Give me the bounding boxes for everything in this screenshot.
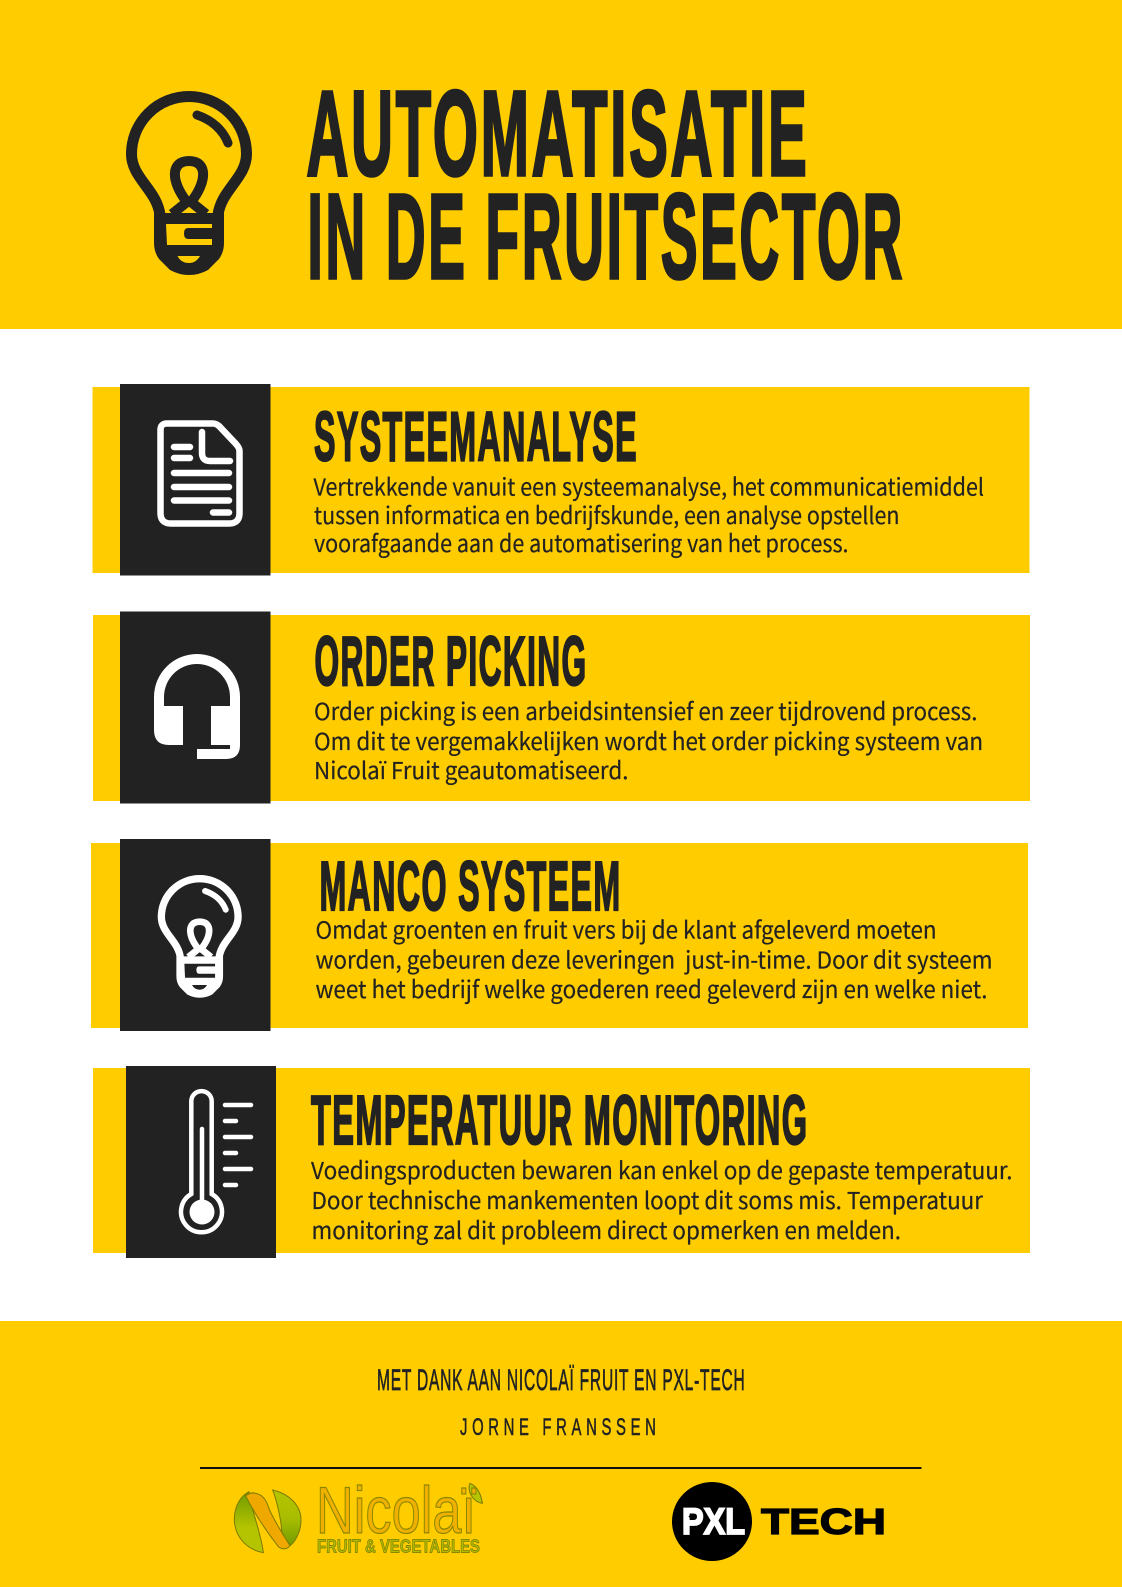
text block [316, 912, 992, 1005]
panel: order picking [93, 612, 1030, 804]
panel: systeemanalyse [92, 384, 1030, 576]
text block: Omdat groenten en fruit vers bij de klant afgeleverd moeten [316, 912, 936, 946]
logo: nicolai: Nicolaï [316, 1473, 477, 1547]
icon: light bulb [161, 879, 238, 998]
credits line: MET DANK AAN NICOLAÏ FRUIT EN PXL-TECH [377, 1364, 746, 1397]
text block: Door technische mankementen loopt dit soms mis. Temperatuur [312, 1182, 984, 1216]
author name: JORNE FRANSSEN [460, 1415, 665, 1441]
panel: temperatuur monitoring [93, 1066, 1030, 1258]
text block: worden, gebeuren deze leveringen just-in-time. Door dit systeem [316, 942, 992, 976]
icon: header light bulb [132, 96, 246, 275]
text block: voorafgaande aan de automatisering van het process. [314, 525, 848, 559]
text block [311, 1152, 1012, 1246]
text block: Order picking is een arbeidsintensief en zeer tijdrovend process. [314, 693, 978, 727]
icon: thermometer [181, 1091, 251, 1232]
title [306, 65, 905, 304]
icon: document [160, 424, 240, 524]
text block: weet het bedrijf welke goederen reed geleverd zijn en welke niet. [316, 971, 988, 1005]
text block: Vertrekkende vanuit een systeemanalyse, het communicatiemiddel [314, 468, 984, 502]
panel: manco systeem [91, 839, 1028, 1031]
text block: Nicolaï Fruit geautomatiseerd. [314, 752, 628, 786]
text block [314, 693, 983, 786]
footer band [0, 1321, 1122, 1587]
text block: Voedingsproducten bewaren kan enkel op de gepaste temperatuur. [311, 1152, 1012, 1186]
panel: order picking: ORDER PICKING [314, 622, 588, 700]
header band [0, 0, 1122, 329]
text block [314, 468, 984, 559]
text block: Om dit te vergemakkelijken wordt het order picking systeem van [314, 723, 983, 757]
logo: nicolai [234, 1473, 482, 1557]
logo: pxl tech: PXL [682, 1501, 745, 1542]
icon: headset [154, 654, 240, 759]
panel: manco systeem: MANCO SYSTEEM [320, 847, 622, 925]
text block: monitoring zal dit probleem direct opmerken en melden. [312, 1212, 901, 1246]
logo: pxl tech: TECH [761, 1501, 886, 1542]
text block: tussen informatica en bedrijfskunde, een analyse opstellen [314, 497, 900, 531]
panel: systeemanalyse: SYSTEEMANALYSE [314, 398, 638, 476]
logo: pxl tech [672, 1482, 886, 1561]
logo: nicolai: FRUIT & VEGETABLES [317, 1536, 480, 1557]
